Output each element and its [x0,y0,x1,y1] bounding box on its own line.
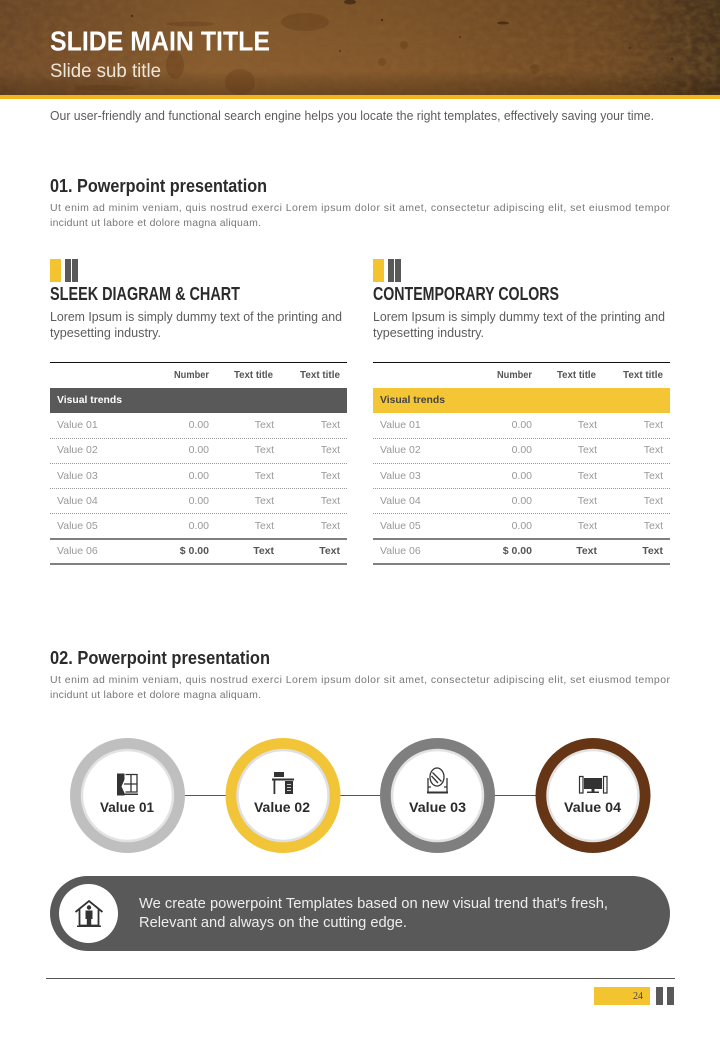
table: visual trends dark: Text [321,520,340,532]
circle: value 03 [380,738,495,853]
callout [50,876,670,951]
icon: mirror [427,768,448,792]
column heading: SLEEK DIAGRAM & CHART [50,284,240,304]
table: visual trends dark: 0.00 [189,520,209,532]
column text: typesetting industry. [50,325,161,340]
table: visual trends yellow: Text [644,419,663,431]
column text: typesetting industry. [373,325,484,340]
header accent bar [0,95,720,99]
panel: left column [50,259,347,565]
panel: right column [373,259,670,565]
table: visual trends yellow: Number [497,370,532,381]
subtitle: Slide sub title [50,61,161,82]
section 1 text: incidunt ut labore et dolore magna aliquam. [50,217,261,229]
label: Value 02 [254,799,310,815]
table: visual trends yellow: Text title [623,370,663,381]
intro text: Our user-friendly and functional search engine helps you locate the right templates, effectively saving your time. [50,108,654,123]
table: visual trends yellow: 0.00 [512,470,532,482]
table: visual trends yellow: Value 06 [380,545,421,557]
table: visual trends yellow: Text [644,520,663,532]
table: visual trends yellow: Value 03 [380,470,421,482]
callout text [139,895,608,931]
table: visual trends yellow: 0.00 [512,520,532,532]
table: visual trends dark: 0.00 [189,495,209,507]
table: visual trends dark [50,362,347,565]
icon: house with person [76,901,102,927]
column text: Lorem Ipsum is simply dummy text of the printing and [50,309,342,324]
connector lines [185,794,536,796]
column text [373,309,665,340]
table: visual trends yellow: Text [642,545,664,557]
icon: column marker bars [50,259,78,282]
table: visual trends dark: Value 05 [57,520,98,532]
table: visual trends dark: Text [321,444,340,456]
table: visual trends dark: Number [174,370,209,381]
table: visual trends dark: Text [253,545,275,557]
table: visual trends yellow: Text [644,495,663,507]
table: visual trends yellow: Value 01 [380,419,421,431]
table: visual trends dark: Text [255,470,274,482]
table: visual trends dark: Text [255,520,274,532]
section 2 text [50,674,670,701]
table: visual trends yellow: Text title [557,370,596,381]
section 1 text: Ut enim ad minim veniam, quis nostrud exerci Lorem ipsum dolor sit amet, consectetur adipiscing elit, set eiusmod tempor [50,202,670,214]
table: visual trends yellow: Text [578,419,597,431]
table: visual trends yellow: Text [576,545,598,557]
icon: desk [272,772,294,794]
table: visual trends yellow: $ 0.00 [503,545,532,557]
table: visual trends dark: Text [321,419,340,431]
section 2 text: Ut enim ad minim veniam, quis nostrud exerci Lorem ipsum dolor sit amet, consectetur adipiscing elit, set eiusmod tempor [50,674,670,686]
table: visual trends dark: Text title [300,370,340,381]
page number [594,987,650,1005]
page number: 24 [633,991,643,1002]
table: visual trends yellow: 0.00 [512,419,532,431]
icon: home theatre [580,776,607,793]
table: visual trends dark: 0.00 [189,444,209,456]
table: visual trends dark: Text [321,470,340,482]
table: visual trends dark: 0.00 [189,419,209,431]
table: visual trends dark: Text title [234,370,273,381]
section 1 heading: 01. Powerpoint presentation [50,176,267,196]
icon: column marker bars [373,259,401,282]
table: visual trends yellow: Text [578,470,597,482]
table: visual trends yellow: Value 05 [380,520,421,532]
table: visual trends yellow: Value 04 [380,495,421,507]
table: visual trends dark: Value 04 [57,495,98,507]
table: visual trends yellow: Text [578,495,597,507]
section 1 text [50,202,670,229]
icon: footer bars [656,987,674,1005]
footer rule [46,978,675,979]
table: visual trends yellow: Visual trends [380,394,445,406]
table: visual trends yellow: Text [578,520,597,532]
section 2 text: incidunt ut labore et dolore magna aliquam. [50,689,261,701]
table: visual trends dark: Text [255,419,274,431]
label: Value 04 [564,799,621,815]
header banner [0,0,720,95]
table: visual trends dark: Text [319,545,341,557]
table: visual trends yellow: Value 02 [380,444,421,456]
table: visual trends dark: 0.00 [189,470,209,482]
table: visual trends dark: Value 02 [57,444,98,456]
column text [50,309,342,340]
label: Value 01 [100,799,154,815]
circle: value 01 [70,738,185,853]
icon: window with curtain [117,774,138,796]
table: visual trends dark: Value 01 [57,419,98,431]
circle: value 04 [536,738,650,853]
table: visual trends dark: Text [255,495,274,507]
table: visual trends yellow: Text [644,444,663,456]
callout text: Relevant and always on the cutting edge. [139,914,407,931]
table: visual trends yellow: 0.00 [512,444,532,456]
table: visual trends dark: Text [255,444,274,456]
section 2 heading: 02. Powerpoint presentation [50,648,270,668]
callout text: We create powerpoint Templates based on new visual trend that's fresh, [139,895,608,912]
column text: Lorem Ipsum is simply dummy text of the printing and [373,309,665,324]
table: visual trends dark: $ 0.00 [180,545,209,557]
table: visual trends yellow [373,362,670,565]
table: visual trends yellow: Text [578,444,597,456]
circle: value 02 [226,738,340,853]
label: Value 03 [409,799,466,815]
table: visual trends yellow: Text [644,470,663,482]
table: visual trends dark: Visual trends [57,394,122,406]
column heading: CONTEMPORARY COLORS [373,284,559,304]
table: visual trends dark: Text [321,495,340,507]
table: visual trends yellow: 0.00 [512,495,532,507]
title: SLIDE MAIN TITLE [50,26,270,56]
table: visual trends dark: Value 03 [57,470,98,482]
table: visual trends dark: Value 06 [57,545,98,557]
